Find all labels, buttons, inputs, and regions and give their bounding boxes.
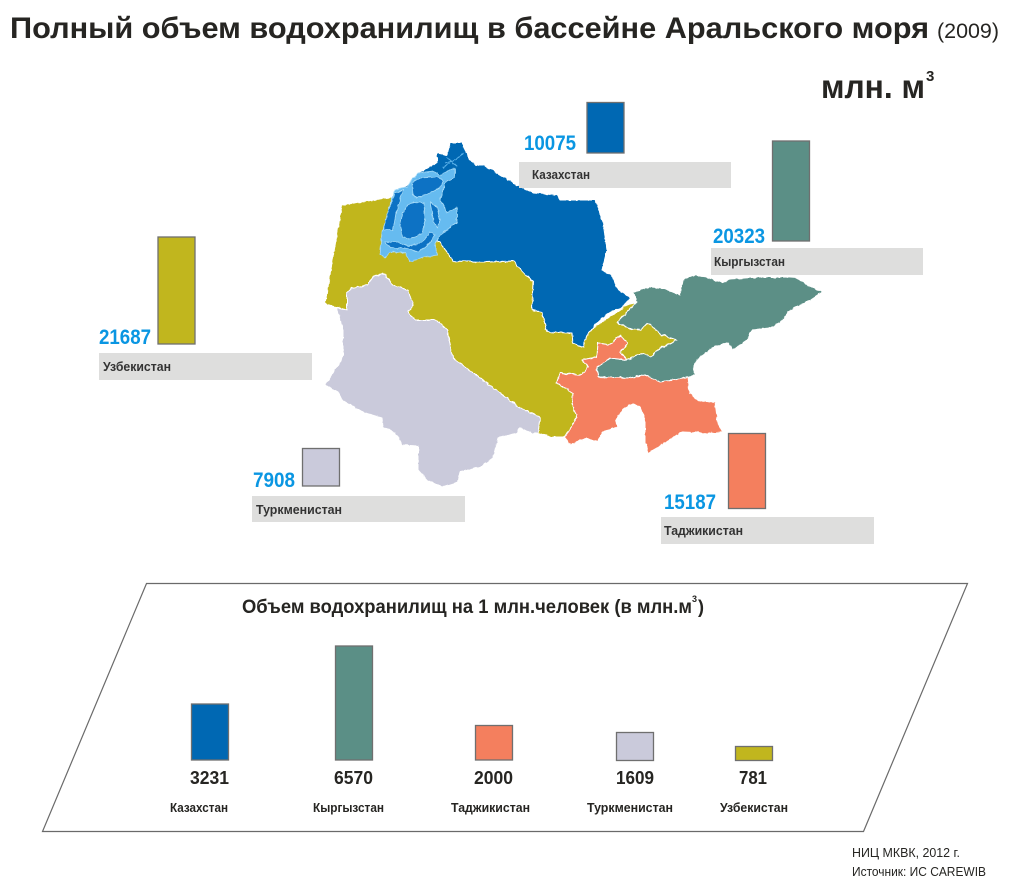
panel: Kazakhstan total: Казахстан — [532, 167, 590, 182]
bar: Kyrgyzstan: Кыргызстан — [313, 801, 384, 815]
bar: Tajikistan — [451, 726, 530, 815]
bar: Kyrgyzstan: 6570 — [334, 768, 373, 788]
panel: Uzbekistan total: Узбекистан — [103, 359, 171, 374]
source note: Источник: ИС CAREWIB — [852, 864, 986, 879]
bar: Uzbekistan: 781 — [739, 768, 767, 788]
panel: Turkmenistan total: 7908 — [253, 469, 295, 492]
map of the Aral Sea basin — [325, 143, 822, 487]
bar: Kyrgyzstan — [313, 646, 384, 815]
bar: Uzbekistan: Узбекистан — [720, 801, 788, 815]
title: Полный объем водохранилищ в бассейне Аральского моря — [10, 12, 929, 45]
source note: НИЦ МКВК, 2012 г. — [852, 845, 960, 860]
bar: Tajikistan: Таджикистан — [451, 801, 530, 815]
bar: Turkmenistan — [587, 732, 673, 815]
title: (2009) — [937, 20, 999, 43]
bar: Turkmenistan: Туркменистан — [587, 801, 673, 815]
bar: Kazakhstan — [170, 704, 229, 815]
panel: Kazakhstan total: 10075 — [524, 132, 576, 155]
panel heading: 3 — [692, 594, 697, 604]
bar: Kazakhstan: Казахстан — [170, 801, 228, 815]
panel: Uzbekistan total — [99, 237, 312, 380]
map region: Uzbekistan — [325, 197, 677, 437]
bar: Turkmenistan: 1609 — [616, 768, 654, 788]
panel: reservoir volume per 1 million people — [42, 584, 968, 832]
map region: Tajikistan — [557, 335, 723, 453]
map region: Kyrgyzstan — [597, 275, 822, 382]
panel: Turkmenistan total — [252, 448, 465, 522]
panel heading: Объем водохранилищ на 1 млн.человек (в млн.м — [242, 597, 692, 618]
panel: Kyrgyzstan total — [711, 141, 923, 275]
panel: Tajikistan total: Таджикистан — [664, 523, 743, 538]
unit label: 3 — [926, 68, 934, 85]
bar: Uzbekistan — [720, 746, 788, 815]
panel: Tajikistan total: 15187 — [664, 491, 716, 514]
unit label: млн. м — [821, 68, 925, 105]
panel: Uzbekistan total: 21687 — [99, 326, 151, 349]
bar: Tajikistan: 2000 — [474, 768, 513, 788]
panel frame — [42, 584, 968, 832]
panel: Tajikistan total — [661, 434, 874, 544]
map region: Turkmenistan — [325, 273, 540, 487]
panel heading: ) — [698, 597, 704, 617]
map feature: Aral Sea — [380, 153, 464, 262]
panel: Kazakhstan total — [519, 102, 731, 188]
panel: Kyrgyzstan total: 20323 — [713, 225, 765, 248]
panel: Turkmenistan total: Туркменистан — [256, 502, 342, 517]
panel: Kyrgyzstan total: Кыргызстан — [714, 254, 785, 269]
bar: Kazakhstan: 3231 — [190, 768, 229, 788]
map region: Kazakhstan — [400, 143, 630, 347]
source note — [852, 845, 986, 879]
